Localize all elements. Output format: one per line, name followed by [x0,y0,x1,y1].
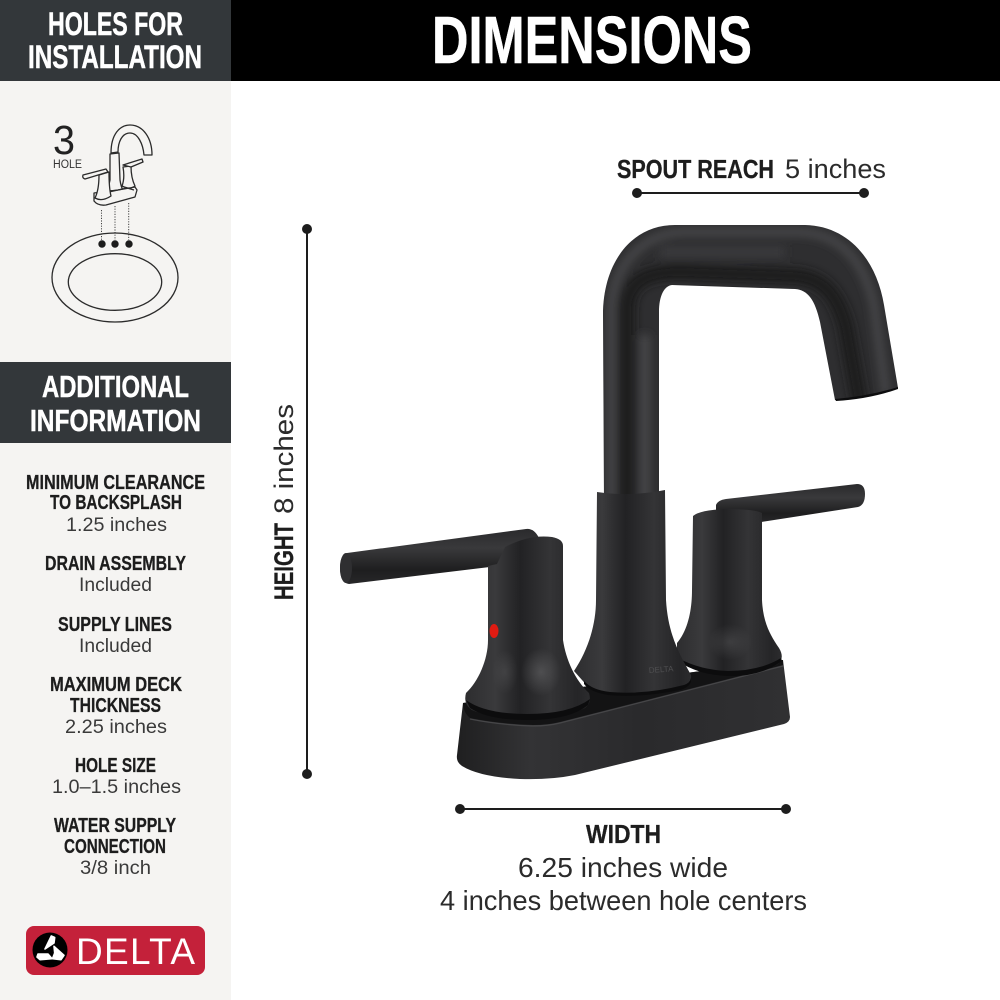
spec: water supply connection: 3/8 inch [80,858,151,879]
logo: delta: DELTA [76,931,195,972]
spec: minimum clearance: MINIMUM CLEARANCE [26,472,205,494]
heading: additional information: ADDITIONAL [42,369,189,404]
faucet deck base plate [457,660,790,779]
spec: drain assembly: Included [79,575,152,596]
dimension: height: 8 inches [269,404,299,514]
spec: maximum deck thickness: 2.25 inches [65,717,167,738]
faucet spout [603,225,898,505]
spec: maximum deck thickness: THICKNESS [70,695,161,717]
heading: dimensions banner: DIMENSIONS [432,3,752,78]
diagram: three hole sink installation [52,117,178,322]
spec: maximum deck thickness: MAXIMUM DECK [50,674,182,696]
dimension: height: HEIGHT [269,523,299,600]
dimension: width [440,804,807,916]
spec: drain assembly [45,553,187,596]
spec: supply lines: SUPPLY LINES [58,614,172,636]
heading: additional information [0,362,231,443]
spec: minimum clearance [26,472,205,536]
spec: minimum clearance: TO BACKSPLASH [50,492,182,514]
faucet right lever handle [716,484,865,523]
icon: sink basin [52,233,178,322]
dimension: spout reach: SPOUT REACH [617,154,774,184]
icon: dotted alignment lines [102,203,129,240]
spec: drain assembly: DRAIN ASSEMBLY [45,553,187,575]
heading: holes for installation [0,0,231,81]
faucet center column [574,490,691,696]
heading: additional information: INFORMATION [30,403,201,438]
spec: minimum clearance: 1.25 inches [66,515,167,536]
spec: supply lines [58,614,172,657]
dimension: width: 6.25 inches wide [518,852,728,883]
dimension: spout reach: 5 inches [785,154,886,184]
spec: maximum deck thickness [50,674,182,738]
logo: delta [26,926,205,975]
label: 3 hole: HOLE [53,159,82,171]
hot water indicator [490,624,498,638]
heading: dimensions banner [231,0,1000,81]
icon: mounting holes [98,240,133,248]
spec: supply lines: Included [79,636,152,657]
spec: water supply connection: WATER SUPPLY [54,815,177,837]
product: matte black faucet [340,225,898,779]
spec: water supply connection [54,815,177,879]
faucet right handle body [677,509,782,676]
faucet left handle body [465,536,590,720]
spec: hole size: HOLE SIZE [75,755,156,777]
heading: holes for installation: HOLES FOR [48,6,183,42]
faucet brand mark: DELTA [649,664,674,675]
dimension: height [269,224,312,779]
faucet left lever handle [340,529,539,584]
spec: water supply connection: CONNECTION [64,836,166,858]
panel: sidebar [0,81,231,1000]
dimension: width: WIDTH [586,819,661,849]
dimension: spout reach [617,154,886,198]
spec: hole size: 1.0–1.5 inches [52,777,181,798]
spec: hole size [52,755,181,798]
heading: holes for installation: INSTALLATION [28,39,202,75]
label: 3 hole: 3 [53,117,75,163]
icon: small faucet outline [83,125,152,205]
label: 3 hole [53,117,82,171]
dimension: width: 4 inches between hole centers [440,885,807,916]
